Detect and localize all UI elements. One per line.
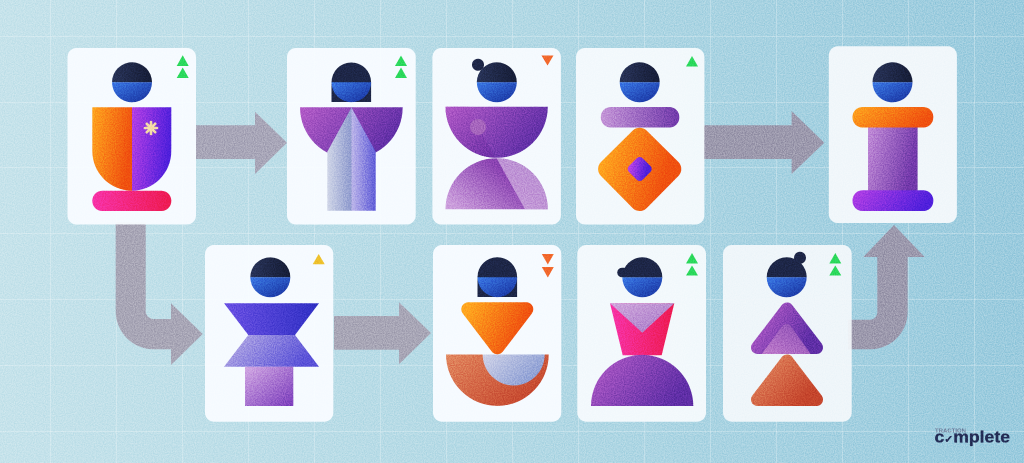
orange triangle [468,309,526,347]
inner half circle [483,354,545,385]
icon: asterisk badge [145,122,157,134]
shoulder pill [601,107,679,128]
upper trapezoid [224,303,319,335]
head [250,257,290,297]
card 1: starting figure [68,48,196,224]
rust triangle [758,361,816,400]
card 5: final figure [829,46,957,223]
card 9: stacked triangles figure [723,245,852,422]
arrow: card 4 to card 5 [704,111,824,174]
rating: down triangle [542,56,554,66]
rating: two up triangles [177,55,189,78]
upper half circle [446,107,548,158]
arrow: card 1 down to card 6 [116,222,203,365]
lower half circle [446,158,548,209]
rating: two up triangles [395,56,407,78]
pink trapezoid [610,303,674,355]
head with hair [332,62,371,102]
logo: Traction Complete: c✓mplete [934,429,1010,447]
arrow: card 1 to card 2 [196,112,287,174]
head with cap [617,257,662,297]
head with bun [472,59,517,102]
rust half circle [446,354,549,406]
logo: Traction Complete: TRACTION [935,428,966,434]
rating: two down triangles [542,254,554,278]
small purple diamond [632,161,648,177]
card 6: hourglass trapezoid figure [205,245,333,422]
rating: two up triangles [829,253,841,276]
top pill [852,107,933,128]
lower trapezoid [224,335,319,367]
arrow: card 6 to card 7 [334,302,431,364]
shield body [92,107,171,191]
collar triangle [610,303,674,333]
head [620,62,660,102]
bottom pill [852,190,933,211]
head [112,62,152,102]
robe column [327,108,376,211]
purple triangle [758,309,816,348]
card 2: kimono figure [287,48,416,224]
rating: two up triangles [686,253,698,276]
column [868,127,918,191]
rating: yellow triangle [313,254,325,264]
head [872,62,912,102]
head with hair [478,257,517,297]
card 4: diamond figure [576,48,704,224]
card 8: dress figure [577,245,706,422]
orange diamond [608,138,671,201]
head with bun [767,252,807,297]
arrow: card 9 up to card 5 [848,225,925,349]
square base [245,367,293,406]
card 7: triangle and bowl figure [433,245,561,422]
base pill [92,191,171,211]
sleeves half circle [300,107,403,159]
skirt half circle [591,355,693,406]
inner light triangle [762,324,811,354]
card 3: hourglass figure [432,48,561,224]
rating: up triangle [686,56,698,66]
